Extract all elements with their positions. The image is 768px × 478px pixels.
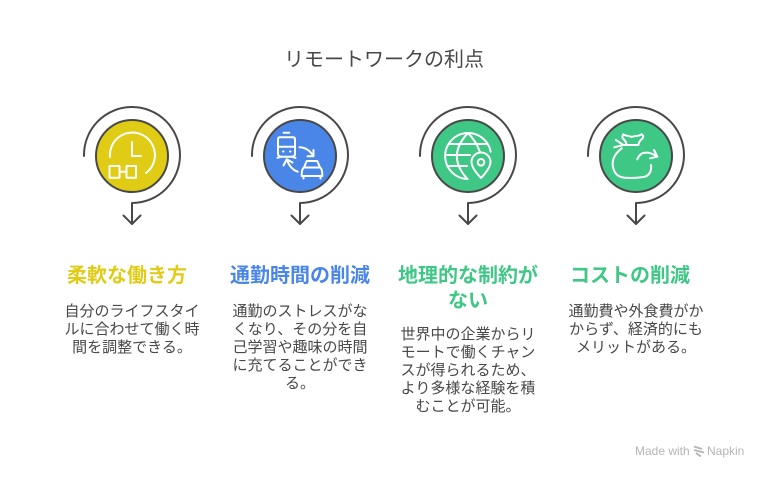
step 4: cost reduction graphic bbox=[588, 107, 684, 224]
icon: globe with location pin bbox=[445, 133, 491, 179]
text: flexible hours: 自分のライフスタイ bbox=[64, 303, 200, 320]
icon: clock and schedule bbox=[110, 133, 155, 178]
text: geographic freedom: スが得られるため、 bbox=[400, 362, 536, 379]
text: commute reduction: る。 bbox=[285, 375, 315, 392]
step 1: flexible hours graphic bbox=[84, 107, 180, 224]
text: commute reduction: 己学習や趣味の時間 bbox=[232, 339, 368, 356]
text: geographic freedom: モートで働くチャン bbox=[401, 344, 535, 361]
text: geographic freedom: 世界中の企業からリ bbox=[400, 326, 536, 343]
heading: geographic freedom: ない bbox=[448, 290, 488, 312]
footer: Made with Napkin: Napkin bbox=[707, 444, 744, 458]
footer: Made with Napkin: Made with bbox=[635, 444, 690, 458]
text: geographic freedom bbox=[400, 326, 536, 415]
text: cost reduction: メリットがある。 bbox=[576, 339, 696, 356]
heading: geographic freedom bbox=[398, 264, 538, 312]
title: リモートワークの利点 bbox=[284, 49, 484, 71]
text: flexible hours: 間を調整できる。 bbox=[72, 339, 192, 356]
text: commute reduction: くなり、その分を自 bbox=[233, 321, 367, 338]
heading: geographic freedom: 地理的な制約が bbox=[398, 265, 538, 287]
text: geographic freedom: より多様な経験を積 bbox=[401, 380, 535, 397]
text: commute reduction bbox=[232, 303, 368, 392]
text: commute reduction: 通勤のストレスがな bbox=[232, 303, 368, 320]
heading: flexible hours: 柔軟な働き方 bbox=[67, 265, 187, 287]
step 2: commute reduction graphic bbox=[252, 107, 348, 224]
text: geographic freedom: むことが可能。 bbox=[415, 398, 520, 415]
icon: money bag with arrow bbox=[613, 134, 657, 178]
icon: train and car with arrows bbox=[278, 133, 322, 178]
text: cost reduction bbox=[568, 303, 704, 356]
heading: cost reduction: コストの削減 bbox=[570, 265, 690, 287]
heading: commute reduction: 通勤時間の削減 bbox=[230, 265, 370, 287]
text: flexible hours bbox=[64, 303, 200, 356]
step 3: geographic freedom graphic bbox=[420, 107, 516, 224]
text: cost reduction: からず、経済的にも bbox=[569, 321, 703, 338]
footer: Made with Napkin bbox=[635, 444, 744, 458]
text: flexible hours: ルに合わせて働く時 bbox=[64, 321, 200, 338]
text: commute reduction: に充てることができ bbox=[232, 357, 368, 374]
text: cost reduction: 通勤費や外食費がか bbox=[568, 303, 704, 320]
